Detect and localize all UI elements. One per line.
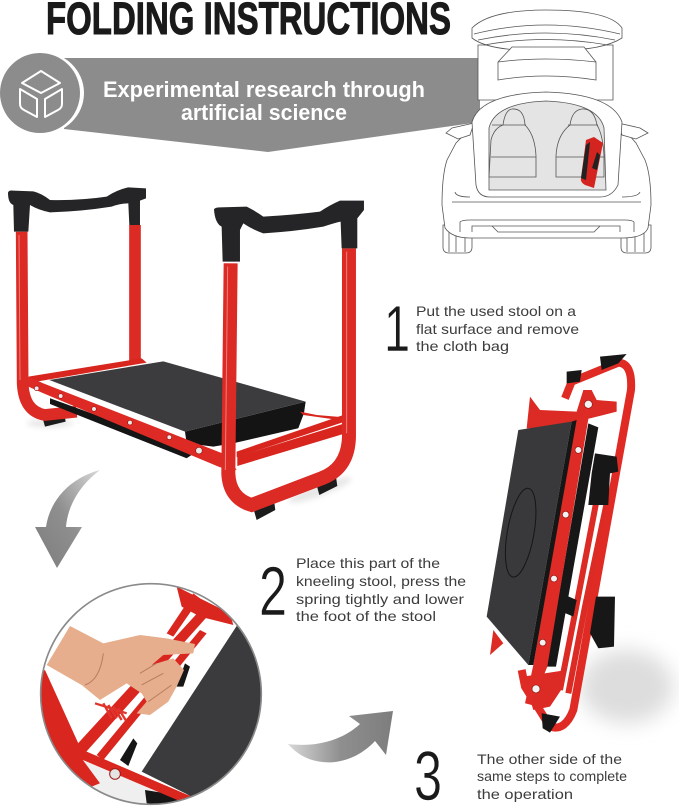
spring — [95, 703, 127, 721]
bolt — [110, 769, 120, 779]
banner: experimental research — [0, 52, 480, 152]
step 1 — [384, 294, 579, 366]
banner shape — [64, 58, 480, 152]
shadow — [580, 650, 673, 723]
cushion — [142, 625, 267, 800]
arrow: curved right — [288, 711, 393, 762]
bumper lines — [452, 192, 641, 232]
front handle — [214, 201, 364, 262]
step 3 text: the operation — [477, 786, 573, 802]
banner text: artificial science — [181, 100, 347, 125]
screws — [34, 386, 202, 454]
step 1 text: flat surface and remove — [416, 321, 579, 337]
circle outline — [41, 584, 261, 804]
number 1: 1 — [384, 294, 410, 366]
floor shade — [83, 760, 158, 804]
side rail — [28, 377, 237, 470]
cushion rear and grips — [542, 354, 627, 733]
arrow: curved down — [35, 470, 100, 568]
step 1 text: Put the used stool on a — [416, 303, 576, 319]
step 2 text: the foot of the stool — [296, 608, 436, 624]
car body — [442, 125, 651, 238]
back uprights — [22, 225, 135, 415]
trunk interior — [489, 101, 606, 190]
tube highlights — [19, 235, 347, 470]
back handle — [8, 187, 146, 232]
fingers shading — [85, 653, 172, 702]
step 2 text: kneeling stool, press the — [296, 573, 466, 589]
right seat — [556, 109, 604, 177]
floor shadows — [27, 419, 353, 507]
front feet — [253, 477, 337, 520]
cushion logo — [500, 486, 542, 579]
step 3 text — [477, 751, 627, 802]
screws — [532, 400, 592, 693]
upper and lower brackets — [490, 390, 617, 710]
back rail — [28, 358, 147, 382]
car line drawing — [442, 10, 651, 253]
icon badge — [0, 52, 84, 134]
folded stool photo — [487, 354, 673, 733]
trunk opening — [472, 92, 622, 197]
cushion — [49, 361, 306, 458]
cross rails — [237, 412, 345, 466]
step 2 — [259, 552, 466, 630]
step 1 text: the cloth bag — [416, 338, 509, 354]
banner text — [103, 77, 425, 125]
folded stool in trunk — [581, 137, 603, 188]
spoiler — [472, 10, 622, 50]
step 2 text: spring tightly and lower — [296, 591, 464, 607]
circular photo: hand pressing spring — [38, 584, 267, 807]
step 2 text — [296, 555, 466, 624]
tailgate — [478, 45, 613, 100]
wheels — [443, 225, 651, 253]
banner text: Experimental research through — [103, 77, 425, 102]
step 3 text: same steps to complete — [477, 768, 627, 784]
back foot — [43, 412, 66, 427]
step 2 text: Place this part of the — [296, 555, 440, 571]
outer frame tube — [522, 363, 631, 728]
number 2: 2 — [259, 552, 287, 630]
front frame tube — [228, 248, 349, 505]
main stool photo — [8, 187, 364, 520]
hand — [47, 626, 195, 715]
cushion — [487, 422, 572, 665]
step 3 — [414, 737, 627, 807]
inner tubes — [560, 500, 607, 693]
red frame — [38, 587, 233, 803]
step 1 text — [416, 303, 579, 354]
black foot bits — [120, 663, 190, 807]
photo contents — [38, 587, 267, 807]
left seat — [489, 109, 536, 177]
front red rail — [525, 405, 591, 705]
mirrors — [446, 123, 648, 139]
cushion edge — [528, 420, 577, 665]
step 3 text: The other side of the — [477, 751, 622, 767]
rear window — [498, 47, 596, 80]
